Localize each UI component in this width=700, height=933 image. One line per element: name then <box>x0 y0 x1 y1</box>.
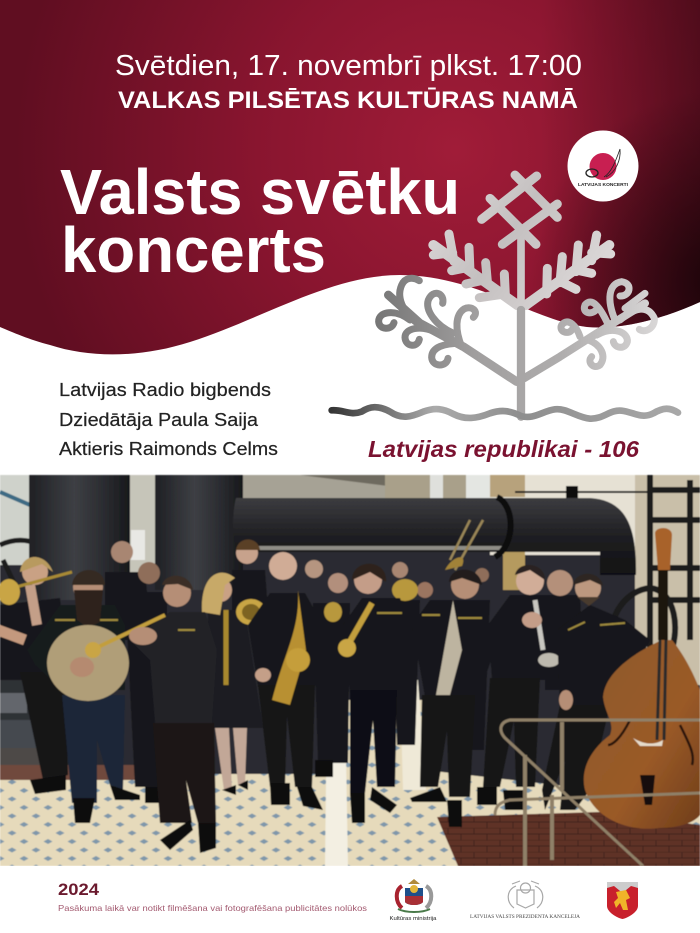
footer year: 2024 <box>58 881 100 899</box>
trombone man <box>0 557 72 794</box>
logo: Ministry of Culture: Kultūras ministrija <box>390 916 438 922</box>
burgundy wave header <box>0 0 700 354</box>
saxophone player <box>248 552 323 810</box>
back row of musicians <box>105 540 585 803</box>
logo: State Chancery of the President: LATVIJAS VALSTS PREZIDENTA KANCELEJA <box>470 914 580 920</box>
double bass <box>584 528 700 829</box>
man playing trumpet, front <box>85 576 217 853</box>
bearded man with gong <box>27 570 140 823</box>
logo: Latvijas Koncerti <box>568 130 638 202</box>
bassist <box>542 574 650 810</box>
title: koncerts <box>61 214 326 286</box>
river wave <box>332 407 678 419</box>
columns <box>29 475 130 600</box>
railing <box>495 720 700 866</box>
horizontal pipe <box>233 498 636 575</box>
white band under photo <box>0 866 700 933</box>
logo: State Chancery of the President <box>470 881 580 920</box>
lower scroll branches <box>379 278 654 417</box>
trumpet man with dark hair <box>338 564 412 823</box>
logo: Ministry of Culture <box>390 879 438 922</box>
icon: silver tree of life <box>332 175 678 419</box>
hall background <box>0 475 700 866</box>
filming notice: Pasākuma laikā var notikt filmēšana vai fotografēšana publicitātes nolūkos <box>58 903 367 913</box>
logo: Latvijas Koncerti: LATVIJAS KONCERTI <box>578 182 629 188</box>
light floor streak <box>325 700 348 866</box>
performers list: Dziedātāja Paula Saija <box>59 410 259 430</box>
performers list: Aktieris Raimonds Celms <box>59 439 278 459</box>
brick floor <box>437 812 700 866</box>
title: Valsts svētku <box>60 156 460 228</box>
date line: Svētdien, 17. novembrī plkst. 17:00 <box>115 50 582 82</box>
performers list: Latvijas Radio bigbends <box>59 380 271 400</box>
woman in black dress <box>202 573 266 795</box>
photo: big band in pump hall <box>0 475 700 866</box>
performers list <box>59 380 278 459</box>
silver trumpet player <box>477 565 560 810</box>
venue line: VALKAS PILSĒTAS KULTŪRAS NAMĀ <box>118 87 578 114</box>
logo: Valka coat of arms <box>607 882 638 919</box>
upper crown lattice and branches <box>433 175 611 310</box>
floor tiles <box>0 700 700 866</box>
silver saxophone player <box>410 520 493 827</box>
title <box>60 156 460 286</box>
anniversary caption: Latvijas republikai - 106 <box>368 436 640 462</box>
